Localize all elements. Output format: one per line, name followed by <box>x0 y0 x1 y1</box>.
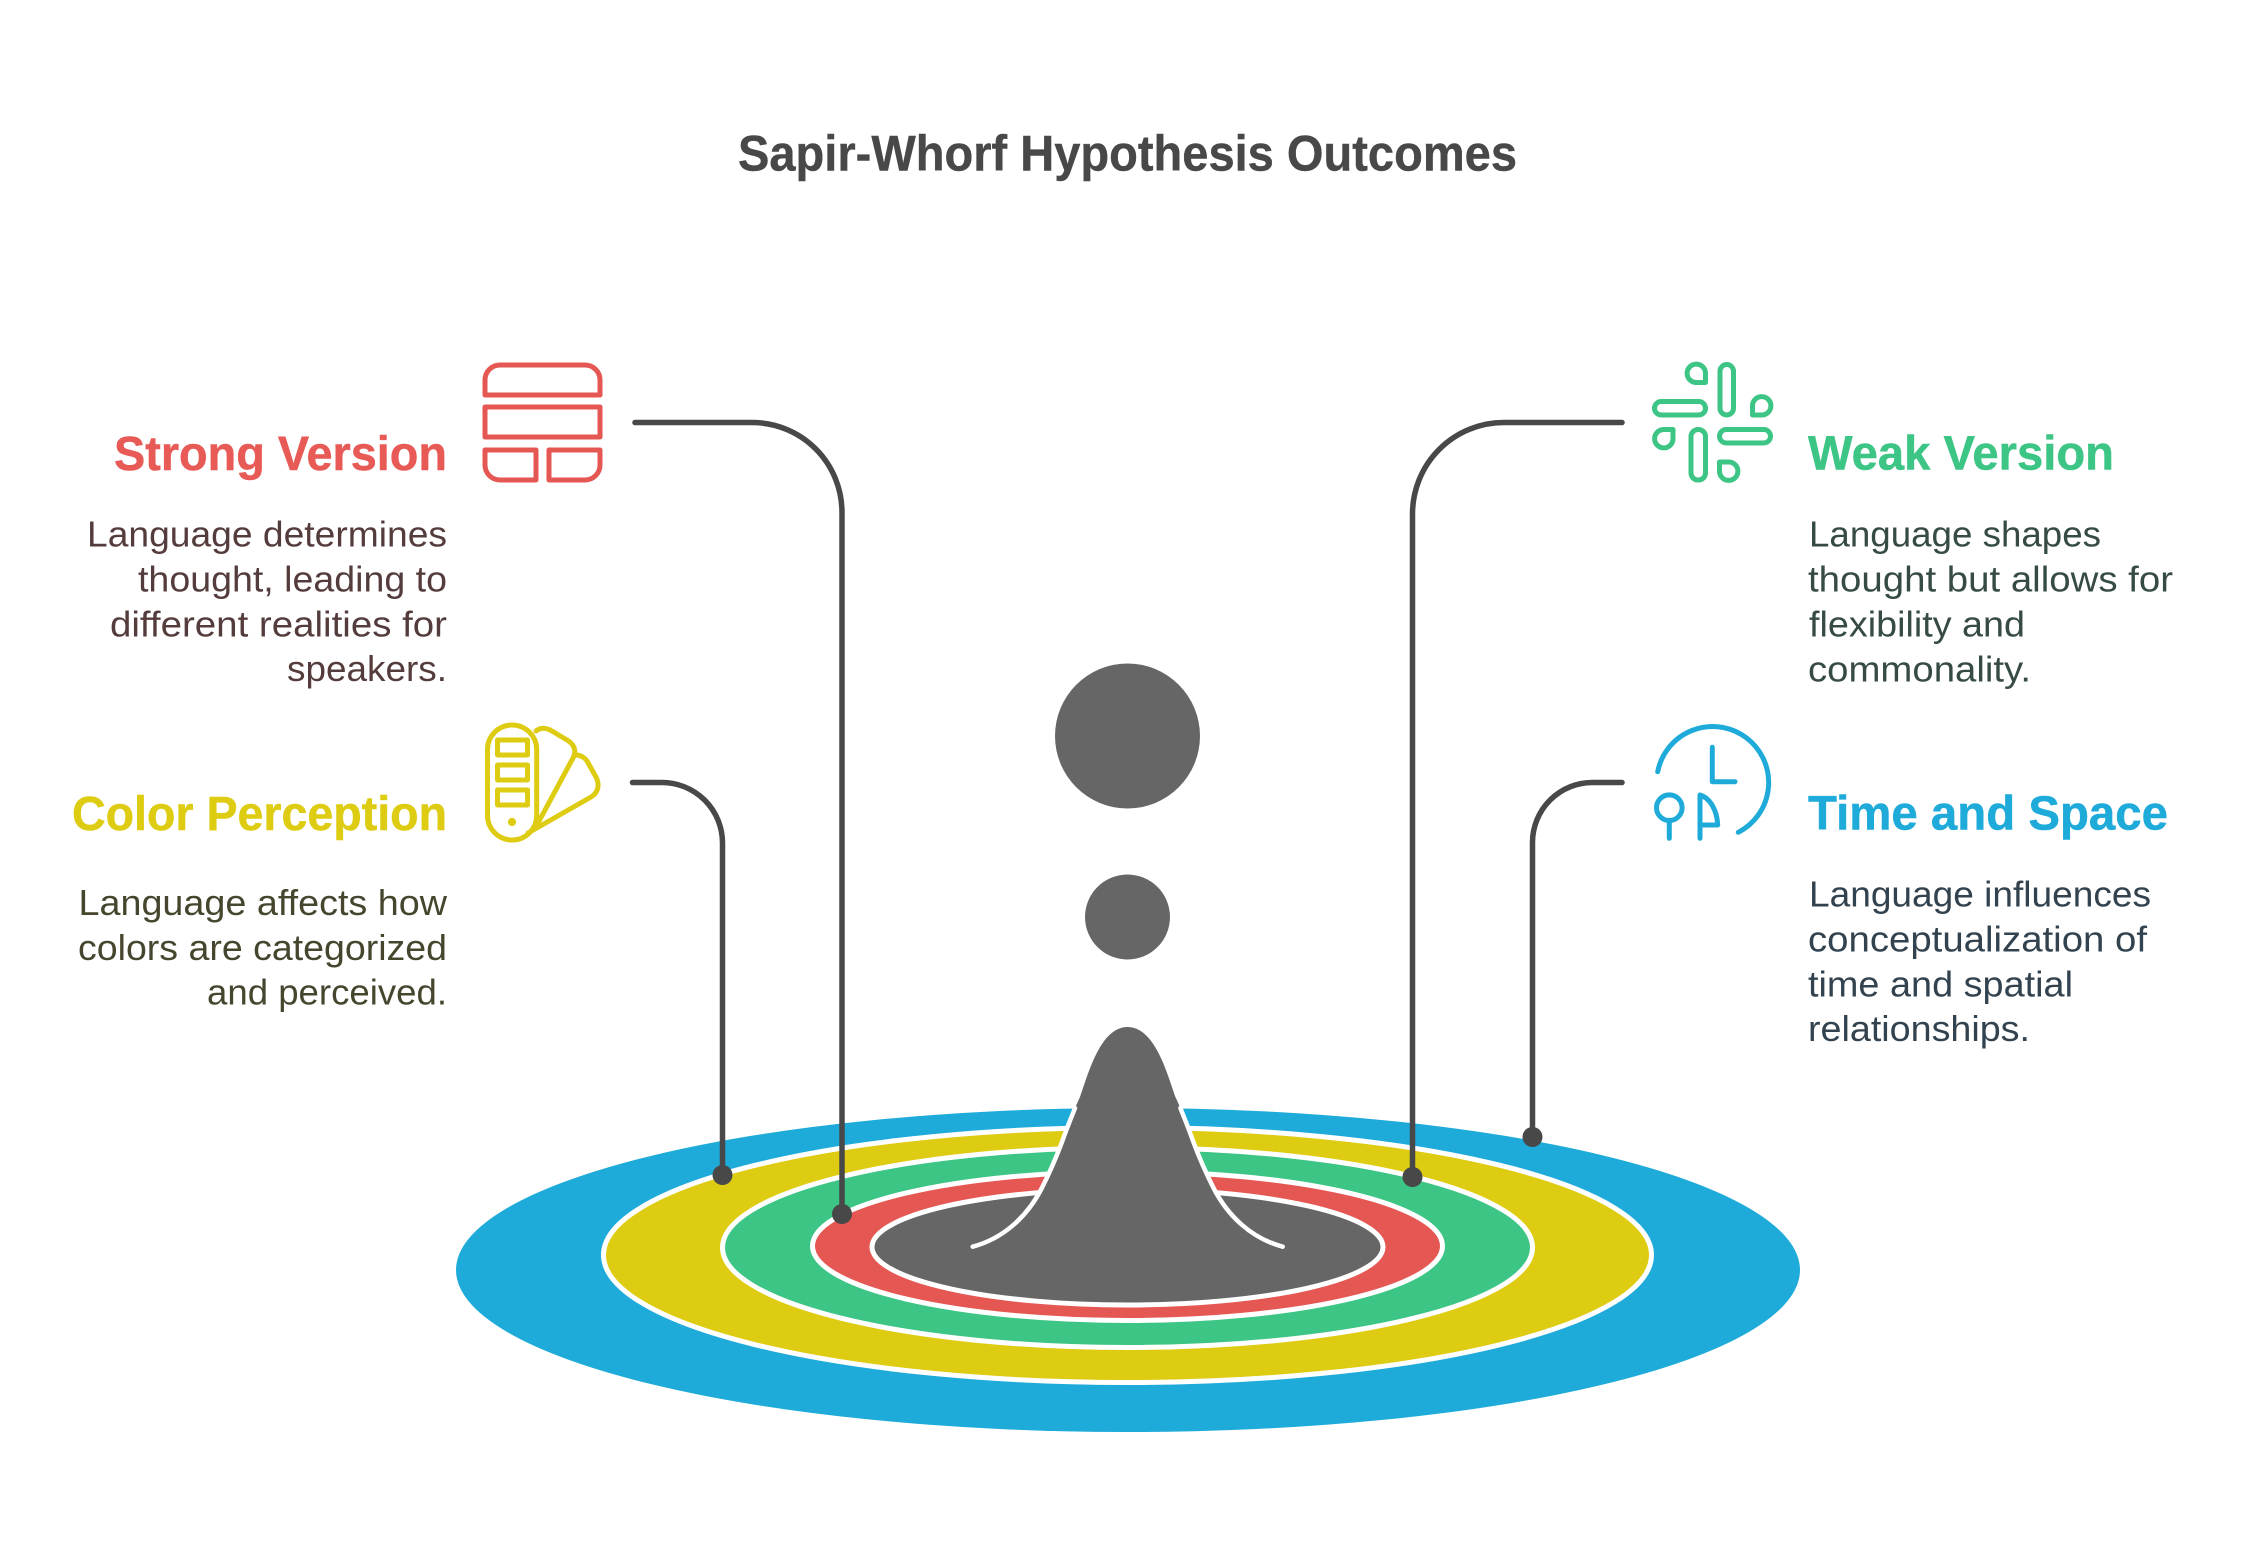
description: weak version: thought but allows for <box>1808 558 2173 600</box>
connector: weak version <box>1402 422 1622 1187</box>
description: time and space <box>1808 874 2151 1049</box>
description: time and space: conceptualization of <box>1808 918 2148 960</box>
ring: time and space (blue) <box>456 1108 1800 1432</box>
description: strong version: Language determines <box>87 514 447 554</box>
description: color perception: colors are categorized <box>78 927 447 968</box>
panel: strong version <box>87 365 600 689</box>
description: weak version: commonality. <box>1808 648 2031 690</box>
description: weak version: Language shapes <box>1809 514 2101 554</box>
splash peak <box>973 1027 1283 1270</box>
small droplet <box>1085 874 1170 960</box>
connector: color perception <box>632 782 732 1185</box>
icon: layout grid <box>485 365 600 480</box>
heading: weak version: Weak Version <box>1808 428 2114 480</box>
description: color perception: and perceived. <box>207 972 447 1012</box>
splash peak white outline <box>973 1108 1283 1247</box>
heading: strong version: Strong Version <box>114 428 447 481</box>
description: weak version <box>1808 514 2173 690</box>
description: weak version: flexibility and <box>1809 604 2025 644</box>
ring: strong version (red) <box>812 1172 1442 1320</box>
description: color perception <box>78 882 448 1012</box>
description: strong version <box>87 514 447 689</box>
heading: color perception: Color Perception <box>72 788 447 841</box>
panel: color perception <box>72 725 598 1012</box>
connector: strong version <box>635 422 852 1224</box>
description: time and space: Language influences <box>1809 874 2151 914</box>
panel: weak version <box>1654 364 2173 690</box>
description: time and space: relationships. <box>1808 1008 2030 1049</box>
panel: time and space <box>1656 727 2168 1049</box>
icon: color swatch fan <box>488 725 598 840</box>
ring: weak version (green) <box>722 1148 1532 1348</box>
heading: time and space: Time and Space <box>1808 788 2168 840</box>
description: color perception: Language affects how <box>78 882 448 923</box>
title: Sapir-Whorf Hypothesis Outcomes <box>738 126 1517 182</box>
description: strong version: speakers. <box>287 648 447 689</box>
description: time and space: time and spatial <box>1808 964 2073 1004</box>
water droplet splash <box>973 664 1283 1270</box>
description: strong version: thought, leading to <box>138 558 447 600</box>
center pool (gray) <box>872 1189 1383 1305</box>
description: strong version: different realities for <box>110 604 447 644</box>
connector: time and space <box>1522 782 1622 1147</box>
icon: clock with pin and flag <box>1656 727 1769 838</box>
ring: color perception (yellow) <box>604 1128 1652 1382</box>
icon: hash of pills and drops <box>1654 364 1771 480</box>
large droplet <box>1055 664 1200 808</box>
concentric rings diagram <box>456 1108 1800 1432</box>
